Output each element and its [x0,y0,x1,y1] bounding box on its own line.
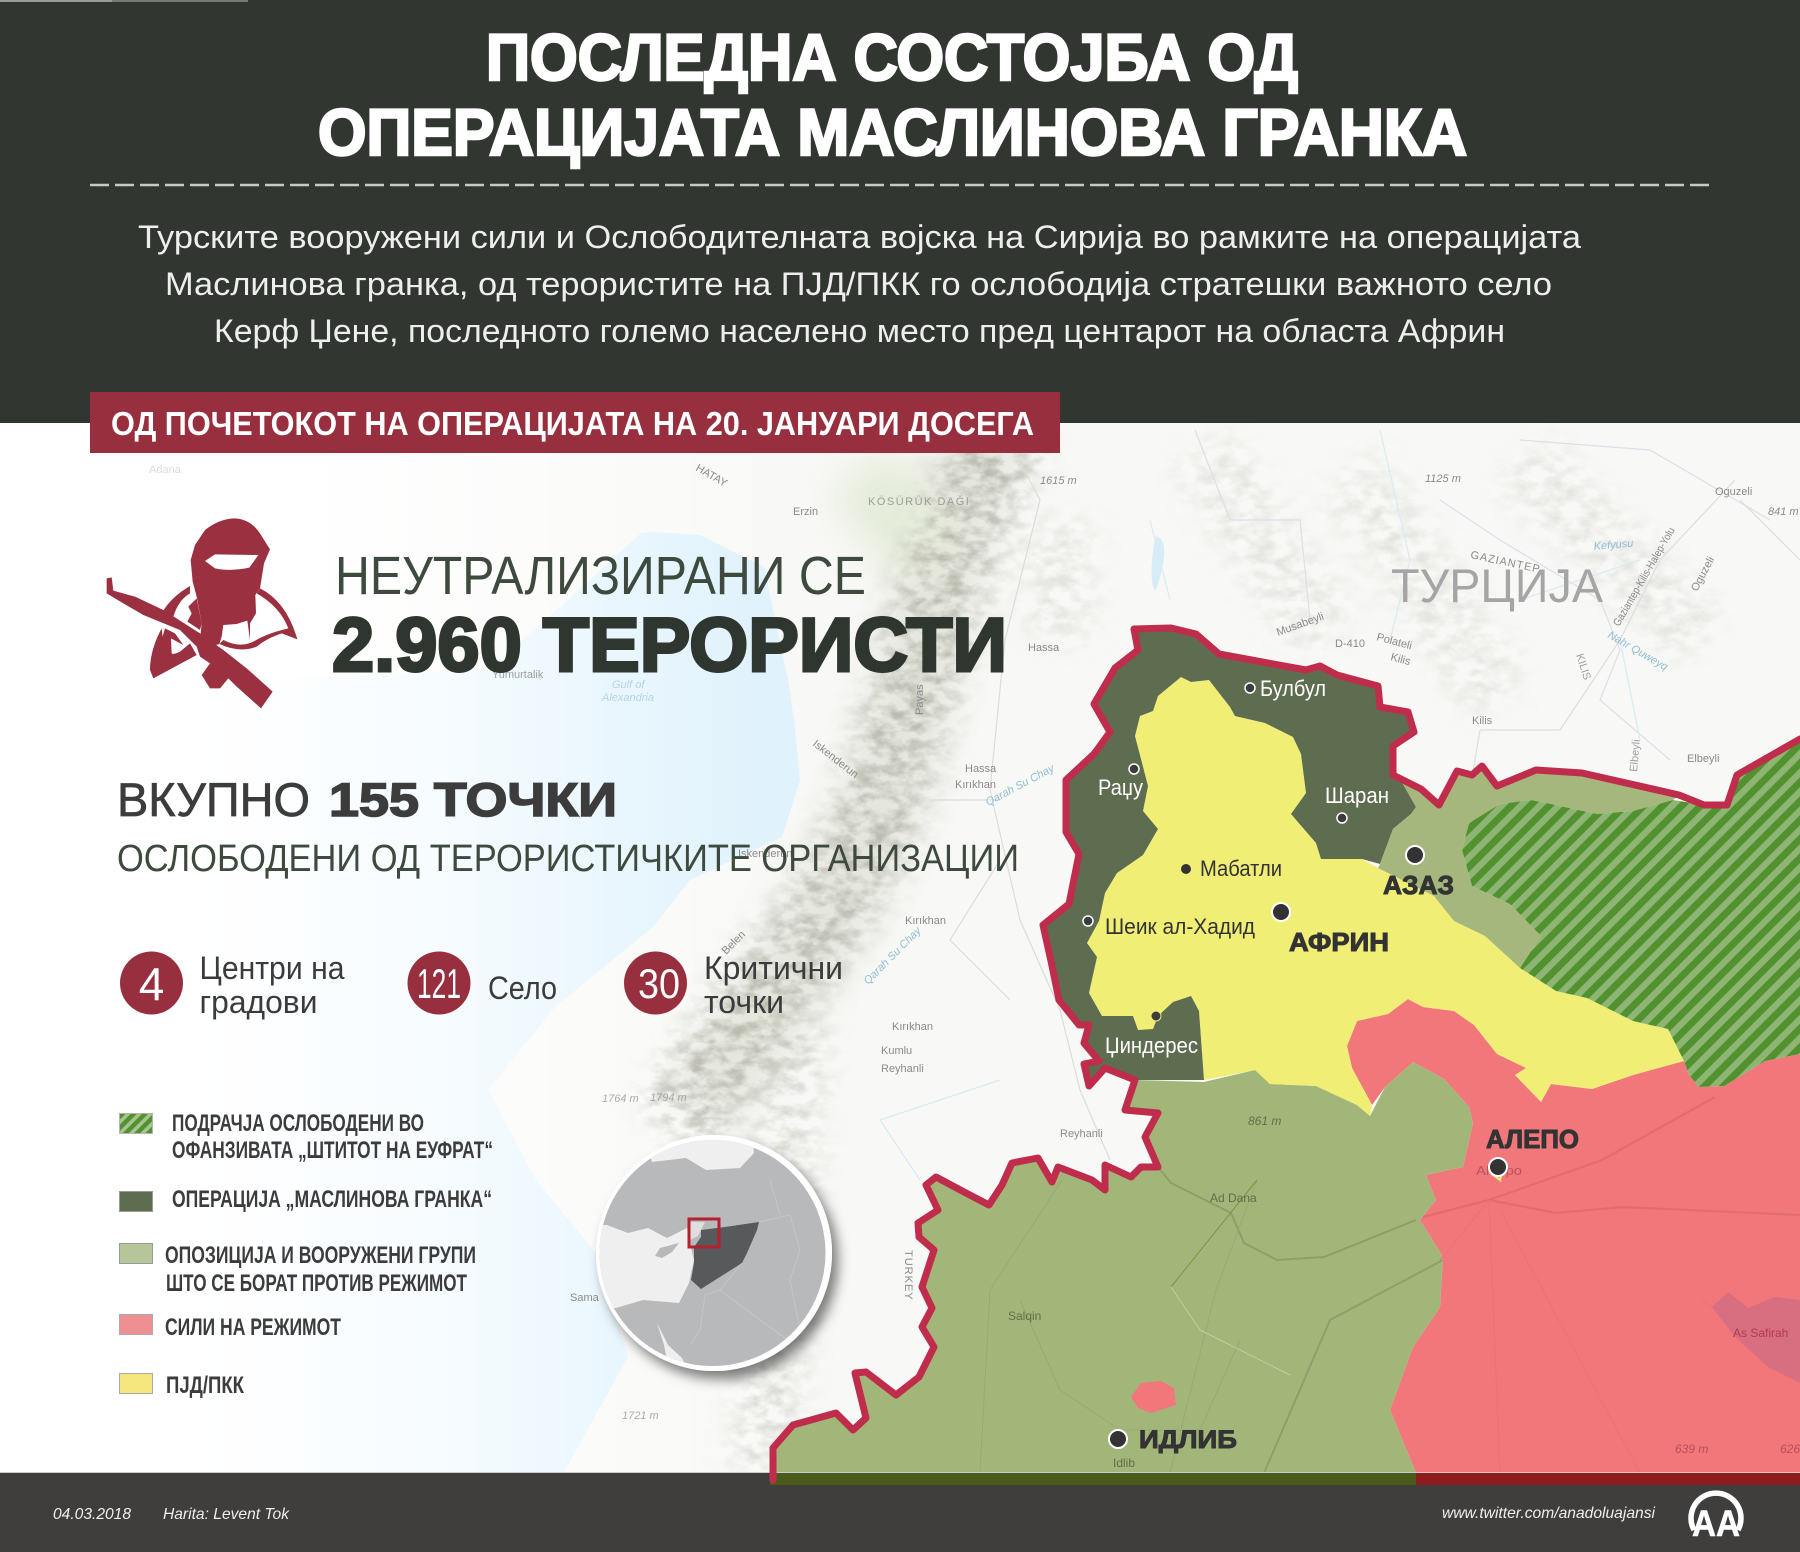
map place labels: Kilis [1472,715,1493,727]
map place labels: Reyhanli [881,1063,924,1075]
stat: 30 critical points: 30 [638,960,680,1007]
map place labels: Kırıkhan [905,915,946,927]
city: Afrin [1272,903,1389,957]
map place labels [149,462,1799,1465]
map place labels: Iskenderun [810,738,860,781]
header band [0,0,1800,423]
stat: 4 city centres: градови [200,984,318,1020]
city: Idlib [1109,1426,1237,1454]
intro paragraph: Керф Џене, последното големо населено место пред центарот на областа Африн [214,313,1505,349]
map place labels: 1615 m [1040,475,1077,487]
stat: 4 city centres [120,950,345,1020]
map place labels: Nahr Quweyq [1606,629,1671,674]
map place labels: Kefyusu [1593,538,1634,553]
map place labels: Musabeyli [1275,611,1326,639]
city: Afrin: АФРИН [1289,927,1389,957]
legend [120,1110,493,1399]
locator red square [689,1219,719,1247]
map place labels: Polateli [1375,631,1413,652]
ribbon heading: ОД ПОЧЕТОКОТ НА ОПЕРАЦИЈАТА НА 20. ЈАНУАРИ ДОСЕГА [111,405,1034,442]
intro paragraph: Маслинова гранка, од терористите на ПЈД/ПКК го ослободија стратешки важното село [165,266,1552,302]
map place labels: 841 m [1768,506,1799,518]
city: Aleppo: АЛЕПО [1486,1124,1579,1154]
inset locator map [585,1130,840,1380]
panel: opposition area around Azaz [1378,766,1679,968]
stat: 4 city centres: Центри на [200,950,345,986]
map place labels: Kumlu [881,1045,912,1057]
map place labels: Elbeyli [1628,739,1643,772]
map place labels: Hassa [1028,642,1060,654]
legend item: regime [120,1314,341,1341]
town: Jinderes [1105,1011,1198,1058]
title [318,20,1467,169]
intro paragraph [138,219,1581,349]
legend item: regime: СИЛИ НА РЕЖИМОТ [165,1314,341,1341]
city: Aleppo [1476,1124,1579,1182]
intro paragraph: Турските вооружени сили и Ослободителната војска на Сирија во рамките на операцијата [138,219,1581,255]
map place labels: Reyhanli [1060,1128,1103,1140]
city: Idlib: ИДЛИБ [1139,1426,1237,1454]
stat: 121 villages [408,952,557,1014]
map place labels: Gaziantep-Kilis-Halep-Yolu [1611,526,1678,628]
town: Sharan: Шаран [1325,783,1389,808]
footer [0,1472,1800,1552]
regime-held pocket near Idlib [1131,1381,1176,1413]
As Safirah patch [1712,1292,1800,1383]
panel: opposition area [773,1062,1473,1473]
map place labels: Qarah Su Chay [862,924,925,987]
map place labels: Payas [914,684,926,715]
legend item: Olive Branch [120,1186,492,1213]
map place labels: HATAY [694,462,730,490]
town: Jinderes: Џиндерес [1105,1033,1198,1058]
legend item: PYD/PKK [120,1372,244,1399]
sea [0,532,800,1474]
map place labels: 1794 m [650,1092,687,1104]
roads over territories [980,1097,1800,1473]
stat: 30 critical points: точки [704,984,784,1020]
roads and rivers [880,423,1800,1180]
city: Aleppo: Aleppo [1476,1163,1522,1178]
top strip [0,0,248,2]
map place labels: Altınözü [811,1425,823,1465]
map place labels: Gulf of [612,679,645,691]
elevation labels on territories: 626 [1780,1442,1800,1456]
As Safirah patch: As Safirah [1733,1326,1788,1340]
stat: 121 villages: Село [488,970,557,1006]
elevation labels on territories: 861 m [1248,1114,1281,1128]
heading: neutralized: НЕУТРАЛИЗИРАНИ СЕ [335,546,866,606]
map place labels: Oguzeli [1689,555,1717,593]
town: Sharan [1325,783,1389,823]
map background [0,423,1800,1474]
stat: 121 villages: 121 [417,960,461,1007]
elevation labels on territories: Idlib [1113,1456,1135,1470]
legend item: Euphrates Shield: ОФАНЗИВАТА „ШТИТОТ НА ЕУФРАТ“ [172,1137,493,1164]
map place labels: 1721 m [622,1410,659,1422]
map place labels: KÖSÜRÜK DAĞI [868,495,970,508]
big number: 2,960 terrorists: 2.960 ТЕРОРИСТИ [332,603,1007,688]
stat: 4 city centres: 4 [139,958,164,1010]
footer credit: Harita: Levent Tok [163,1506,290,1523]
ribbon heading [90,392,1060,453]
map place labels: Sama [570,1292,600,1304]
border line [773,628,1800,1480]
map place labels: 1764 m [602,1093,639,1105]
town: Mabatli: Мабатли [1200,856,1282,881]
panel: Olive Branch operation area [1043,628,1416,1086]
city: Azaz: АЗАЗ [1383,870,1454,900]
legend item: opposition [120,1242,476,1297]
map place labels: D-410 [1335,638,1365,650]
heading: total 155 points [117,773,617,826]
map place labels: Qarah Su Chay [984,762,1058,809]
icon: Anadolu Agency logo: AA [1692,1503,1740,1544]
map place labels: Erzin [793,506,818,518]
town: Raju: Раџу [1098,775,1143,800]
map place labels: Adana [149,464,182,476]
footer twitter link: www.twitter.com/anadoluajansi [1442,1505,1655,1522]
map place labels: Iskenderun [738,848,792,860]
elevation labels on territories: Salqin [1008,1309,1041,1323]
legend item: Euphrates Shield: ПОДРАЧЈА ОСЛОБОДЕНИ ВО [172,1110,424,1137]
elevation labels on territories: Ad Dana [1210,1191,1257,1205]
heading: total 155 points: ВКУПНО [117,773,310,826]
town: Raju [1098,764,1143,800]
town: Bulbul: Булбул [1260,676,1326,701]
panel: Euphrates Shield hatched area [1462,739,1800,1087]
town: Sheikh al-Hadid: Шеик ал-Хадид [1105,914,1255,939]
legend item: PYD/PKK: ПЈД/ПКК [166,1372,244,1399]
elevation labels on territories: 639 m [1675,1442,1708,1456]
map place labels: Belen [720,929,748,957]
map place labels: TURKEY [902,1250,914,1301]
map place labels: 1125 m [1425,473,1461,485]
country label: Turkey: ТУРЦИЈА [1391,559,1604,612]
elevation labels on territories [1008,1114,1800,1470]
subheading: ОСЛОБОДЕНИ ОД ТЕРОРИСТИЧКИТЕ ОРГАНИЗАЦИИ [117,838,1019,880]
footer date: 04.03.2018 [53,1506,131,1523]
stat: 30 critical points: Критични [704,950,843,986]
map place labels: Kilis [1389,651,1412,668]
map place labels: Hassa [965,763,997,775]
title: ПОСЛЕДНА СОСТОЈБА ОД [486,20,1298,94]
legend item: Euphrates Shield [120,1110,493,1164]
stat: 30 critical points [624,950,843,1020]
map place labels: KILIS [1573,652,1593,682]
map place labels: Kırıkhan [892,1021,933,1033]
panel: PYD/PKK area [1087,677,1684,1116]
map place labels: Elbeyli [1687,753,1719,765]
icon: masked terrorist with rifle [107,518,297,708]
map place labels: Oguzeli [1715,486,1752,498]
panel: regime forces area [1347,999,1800,1473]
map place labels: Alexandria [601,692,654,704]
legend item: Olive Branch: ОПЕРАЦИЈА „МАСЛИНОВА ГРАНКА“ [172,1186,492,1213]
city: Azaz [1383,846,1454,900]
map place labels: Kırıkhan [955,779,996,791]
title: ОПЕРАЦИЈАТА МАСЛИНОВА ГРАНКА [318,95,1467,169]
legend item: opposition: ШТО СЕ БОРАТ ПРОТИВ РЕЖИМОТ [166,1270,467,1297]
map place labels: Yumurtalik [492,669,544,681]
map place labels: GAZIANTEP [1469,549,1542,576]
legend item: opposition: ОПОЗИЦИЈА И ВООРУЖЕНИ ГРУПИ [165,1242,476,1269]
heading: total 155 points: 155 ТОЧКИ [329,773,617,826]
